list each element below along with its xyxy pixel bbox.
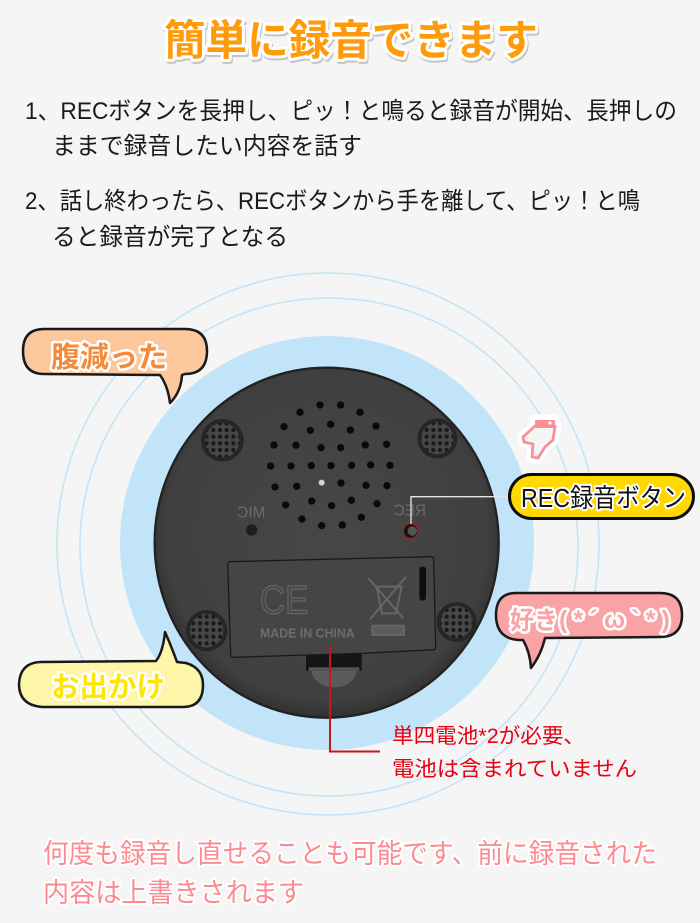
icon: pointing hand [523, 420, 556, 458]
speaker holes [267, 401, 394, 529]
crossed-out bin icon [368, 577, 406, 635]
rubber feet [188, 420, 475, 649]
REC leader line [411, 497, 500, 524]
instructions text [25, 98, 677, 251]
MADE IN CHINA text: MADE IN CHINA [260, 626, 355, 640]
device back [155, 368, 500, 718]
battery slot [419, 567, 426, 601]
pink speech bubble [496, 593, 682, 668]
pink speech bubble: 好き [510, 607, 558, 635]
blue circle backdrop [120, 336, 534, 750]
battery cover [228, 557, 436, 657]
CE mark: CE [260, 578, 308, 622]
battery note: 単四電池*2が必要、 [392, 725, 585, 748]
peach speech bubble: 腹減った [51, 341, 167, 374]
bottom note: 内容は上書きされます [43, 878, 304, 908]
concentric blue rings [57, 273, 599, 815]
red leader line [330, 646, 380, 752]
REC button [403, 524, 418, 538]
mirrored MIC label: MIC [237, 504, 265, 521]
title: 簡単に録音できます [164, 17, 538, 64]
yellow speech bubble: お出かけ [51, 671, 165, 704]
instructions text: ると録音が完了となる [52, 224, 288, 251]
peach speech bubble [23, 329, 207, 403]
battery tab [306, 653, 362, 687]
battery note [392, 725, 637, 781]
REC leader line continuation [500, 496, 512, 498]
bottom note: 何度も録音し直せることも可能です、前に録音された [43, 839, 657, 869]
yellow speech bubble [19, 632, 203, 707]
instructions text: 2、話し終わったら、RECボタンから手を離して、ピッ！と鳴 [25, 188, 640, 215]
battery note: 電池は含まれていません [392, 758, 637, 781]
instructions text: ままで録音したい内容を話す [52, 133, 362, 160]
bottom note [43, 839, 657, 908]
device body [155, 368, 499, 718]
mic hole [246, 524, 257, 536]
pink speech bubble: (*´ω`*) [559, 606, 670, 634]
instructions text: 1、RECボタンを長押し、ピッ！と鳴ると録音が開始、長押しの [25, 98, 677, 125]
mirrored REC label: REC [394, 502, 426, 519]
REC button label [510, 474, 694, 518]
